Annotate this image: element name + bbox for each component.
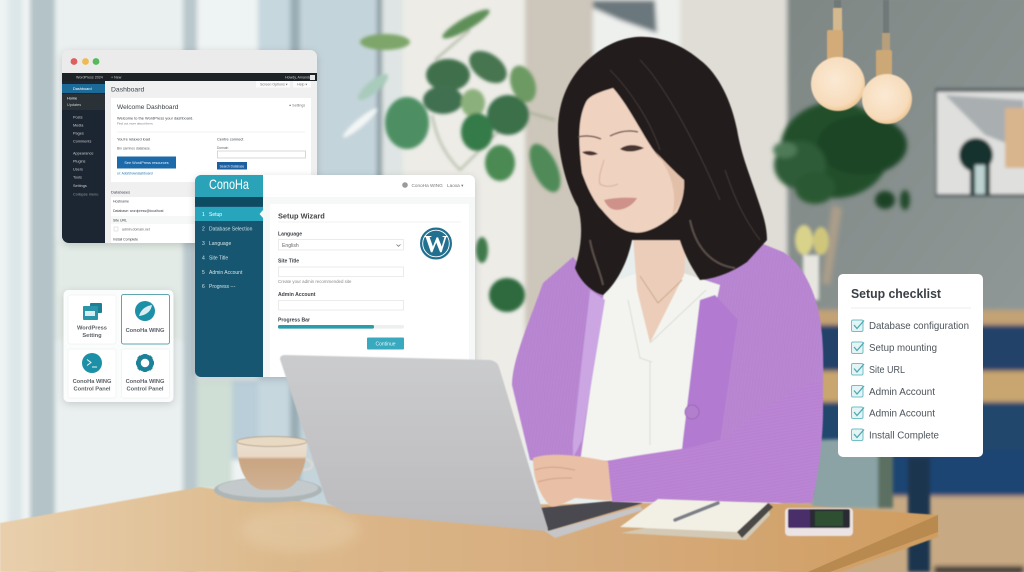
pen — [675, 503, 718, 520]
admin sidebar: Plugins — [73, 160, 86, 164]
wizard card — [270, 204, 469, 384]
browser title bar — [70, 58, 100, 65]
hair back — [558, 37, 767, 295]
tile: WordPress Setting — [68, 295, 116, 344]
welcome card: You're relaxed load — [117, 136, 150, 142]
continue button — [367, 338, 404, 350]
admin sidebar: Comments — [73, 140, 91, 144]
checklist item: Admin Account: Admin Account — [869, 408, 935, 420]
databases table: Install Complete — [113, 238, 138, 242]
leafy plant by window — [341, 5, 567, 312]
databases table: Site URL — [113, 218, 127, 222]
admin sidebar: Home — [67, 96, 77, 100]
sidebar with steps: 2 — [202, 226, 205, 232]
sidebar with steps: 3 — [202, 241, 205, 247]
search button: Search Database — [220, 164, 245, 168]
admin sidebar — [62, 81, 105, 245]
hand on keyboard — [533, 455, 612, 506]
ConoHa logo: ConoHa — [209, 176, 249, 192]
wizard card: Site Title — [278, 258, 299, 264]
cup body — [237, 442, 307, 490]
welcome card: ● Settings — [289, 104, 305, 108]
welcome card: Welcome to the WordPress your dashboard. — [117, 116, 193, 120]
top bar: ConoHa WING — [412, 183, 443, 188]
woman: cardigan body — [512, 218, 823, 503]
cup handle — [303, 458, 312, 470]
ConoHa logo — [195, 175, 263, 197]
icon tiles panel — [64, 290, 174, 402]
databases table: Databases — [111, 190, 130, 194]
checklist item: Admin Account: Admin Account — [869, 386, 935, 398]
admin sidebar: Settings — [73, 184, 87, 188]
admin sidebar: Appearance — [73, 152, 93, 156]
sidebar with steps: Database Selection — [209, 226, 253, 232]
cardigan sleeve — [608, 380, 823, 503]
woman: necklace — [640, 276, 682, 303]
woman: cardigan button — [685, 405, 699, 419]
checklist item: Database configuration: Database configuration — [869, 320, 969, 332]
checklist item: Site URL: Site URL — [869, 364, 905, 376]
woman: neck and chest — [632, 218, 688, 343]
icon: WordPress logo: W — [424, 232, 448, 258]
sidebar with steps: Setup — [209, 212, 222, 218]
woman: left lapel — [573, 290, 605, 458]
laptop base and keyboard — [536, 501, 643, 538]
screen options tabs — [256, 81, 311, 88]
welcome card: or: Add/show/dashboard — [117, 172, 153, 176]
smartphone — [785, 508, 853, 536]
sidebar with steps: 6 — [202, 284, 205, 290]
checklist heading: Setup checklist — [851, 286, 942, 301]
sidebar with steps: Progress --- — [209, 284, 236, 290]
woman: blouse collar — [628, 290, 706, 445]
tile: ConoHa WING Control Panel gear: Control Panel — [127, 386, 164, 392]
tile: WordPress Setting: WordPress — [77, 326, 107, 332]
language select — [278, 240, 404, 250]
sidebar with steps: 1 — [202, 212, 205, 218]
wooden table — [0, 487, 938, 572]
tile: WordPress Setting: Setting — [82, 333, 102, 339]
dashboard heading: Dashboard — [111, 86, 144, 94]
setup checklist panel — [838, 274, 983, 457]
admin sidebar: Tools — [73, 176, 82, 180]
welcome card: Find out more about them. — [117, 122, 153, 126]
databases table: admin.domain.net — [122, 228, 150, 232]
eyebrows — [578, 131, 638, 139]
sidebar with steps: 5 — [202, 270, 205, 276]
setup wizard panel — [195, 175, 475, 384]
eyes — [582, 145, 644, 155]
wizard card: Progress Bar — [278, 318, 310, 324]
admin sidebar: Users — [73, 168, 83, 172]
woman: white blouse — [580, 272, 720, 463]
wizard card: Setup Wizard — [278, 212, 325, 220]
admin sidebar: Posts — [73, 116, 83, 120]
WordPress admin bar: Howdy, Amanda — [285, 76, 311, 80]
resources button — [117, 156, 176, 168]
databases table: Hostname — [113, 200, 129, 204]
notebook with pen — [620, 499, 773, 540]
language select: English — [282, 243, 299, 249]
admin sidebar: Media — [73, 124, 84, 128]
admin sidebar: Pages — [73, 132, 84, 136]
admin sidebar: Collapse menu — [73, 192, 98, 196]
sidebar with steps: Site Title — [209, 256, 228, 262]
woman: head and hair — [558, 37, 767, 295]
checklist item: Install Complete: Install Complete — [869, 430, 939, 442]
potted plant behind lamps — [773, 102, 910, 285]
face — [579, 88, 684, 233]
lips — [604, 198, 637, 210]
sidebar with steps: 4 — [202, 256, 205, 262]
notebook binding — [737, 503, 773, 538]
welcome card: Domain — [217, 146, 229, 150]
checklist item: Site URL — [852, 364, 905, 376]
yellow flower in vase — [795, 225, 829, 300]
search button — [217, 162, 247, 170]
tile: ConoHa WING Control Panel gear — [122, 349, 170, 398]
WordPress admin bar: + New — [111, 76, 122, 80]
tile: ConoHa WING: ConoHa WING — [126, 328, 165, 334]
wizard card: Language — [278, 232, 302, 238]
welcome card: Welcome Dashboard — [117, 104, 179, 111]
tile: ConoHa WING Control Panel gear: ConoHa WING — [126, 379, 165, 385]
sidebar with steps: Admin Account — [209, 270, 243, 276]
continue button: Continue — [375, 341, 396, 347]
saucer — [214, 478, 322, 502]
tile: ConoHa WING Control Panel terminal — [68, 349, 116, 398]
screen options tabs: Screen Options ▾ — [260, 82, 288, 86]
databases table: Database: wordpress@localhost — [113, 209, 163, 213]
laptop lid — [280, 355, 548, 531]
top bar — [263, 175, 475, 197]
tile: ConoHa WING Control Panel terminal: Control Panel — [74, 386, 111, 392]
sidebar with steps: Language — [209, 241, 231, 247]
nose — [599, 160, 618, 186]
welcome card — [111, 98, 311, 182]
picture frame on wall — [935, 88, 1024, 197]
WordPress admin bar — [62, 73, 317, 81]
wizard card: Create your admin recommended site — [278, 279, 352, 284]
chair behind table — [812, 438, 930, 572]
coffee cup on saucer — [214, 436, 322, 502]
wizard card: Admin Account — [278, 292, 316, 298]
WordPress admin bar: WordPress 2024 — [76, 76, 103, 80]
admin sidebar: Dashboard — [73, 87, 92, 91]
screen options tabs: Help ▾ — [297, 82, 307, 86]
dashboard panel — [62, 50, 317, 245]
icon: WordPress logo — [420, 228, 452, 260]
databases table — [111, 191, 195, 243]
pendant lamps — [811, 0, 912, 124]
progress bar — [278, 325, 404, 329]
welcome card: Bin carrines database. — [117, 146, 151, 150]
checklist item: Setup mounting: Setup mounting — [869, 342, 937, 354]
woman: right lapel — [682, 295, 738, 450]
resources button: See WordPress resources — [124, 161, 169, 165]
sidebar with steps — [195, 175, 263, 377]
top bar: Laoxa ▾ — [447, 183, 464, 188]
admin sidebar: Updates — [67, 103, 81, 107]
welcome card: Centre connect — [217, 136, 244, 142]
tile: ConoHa WING Control Panel terminal: ConoHa WING — [73, 379, 112, 385]
